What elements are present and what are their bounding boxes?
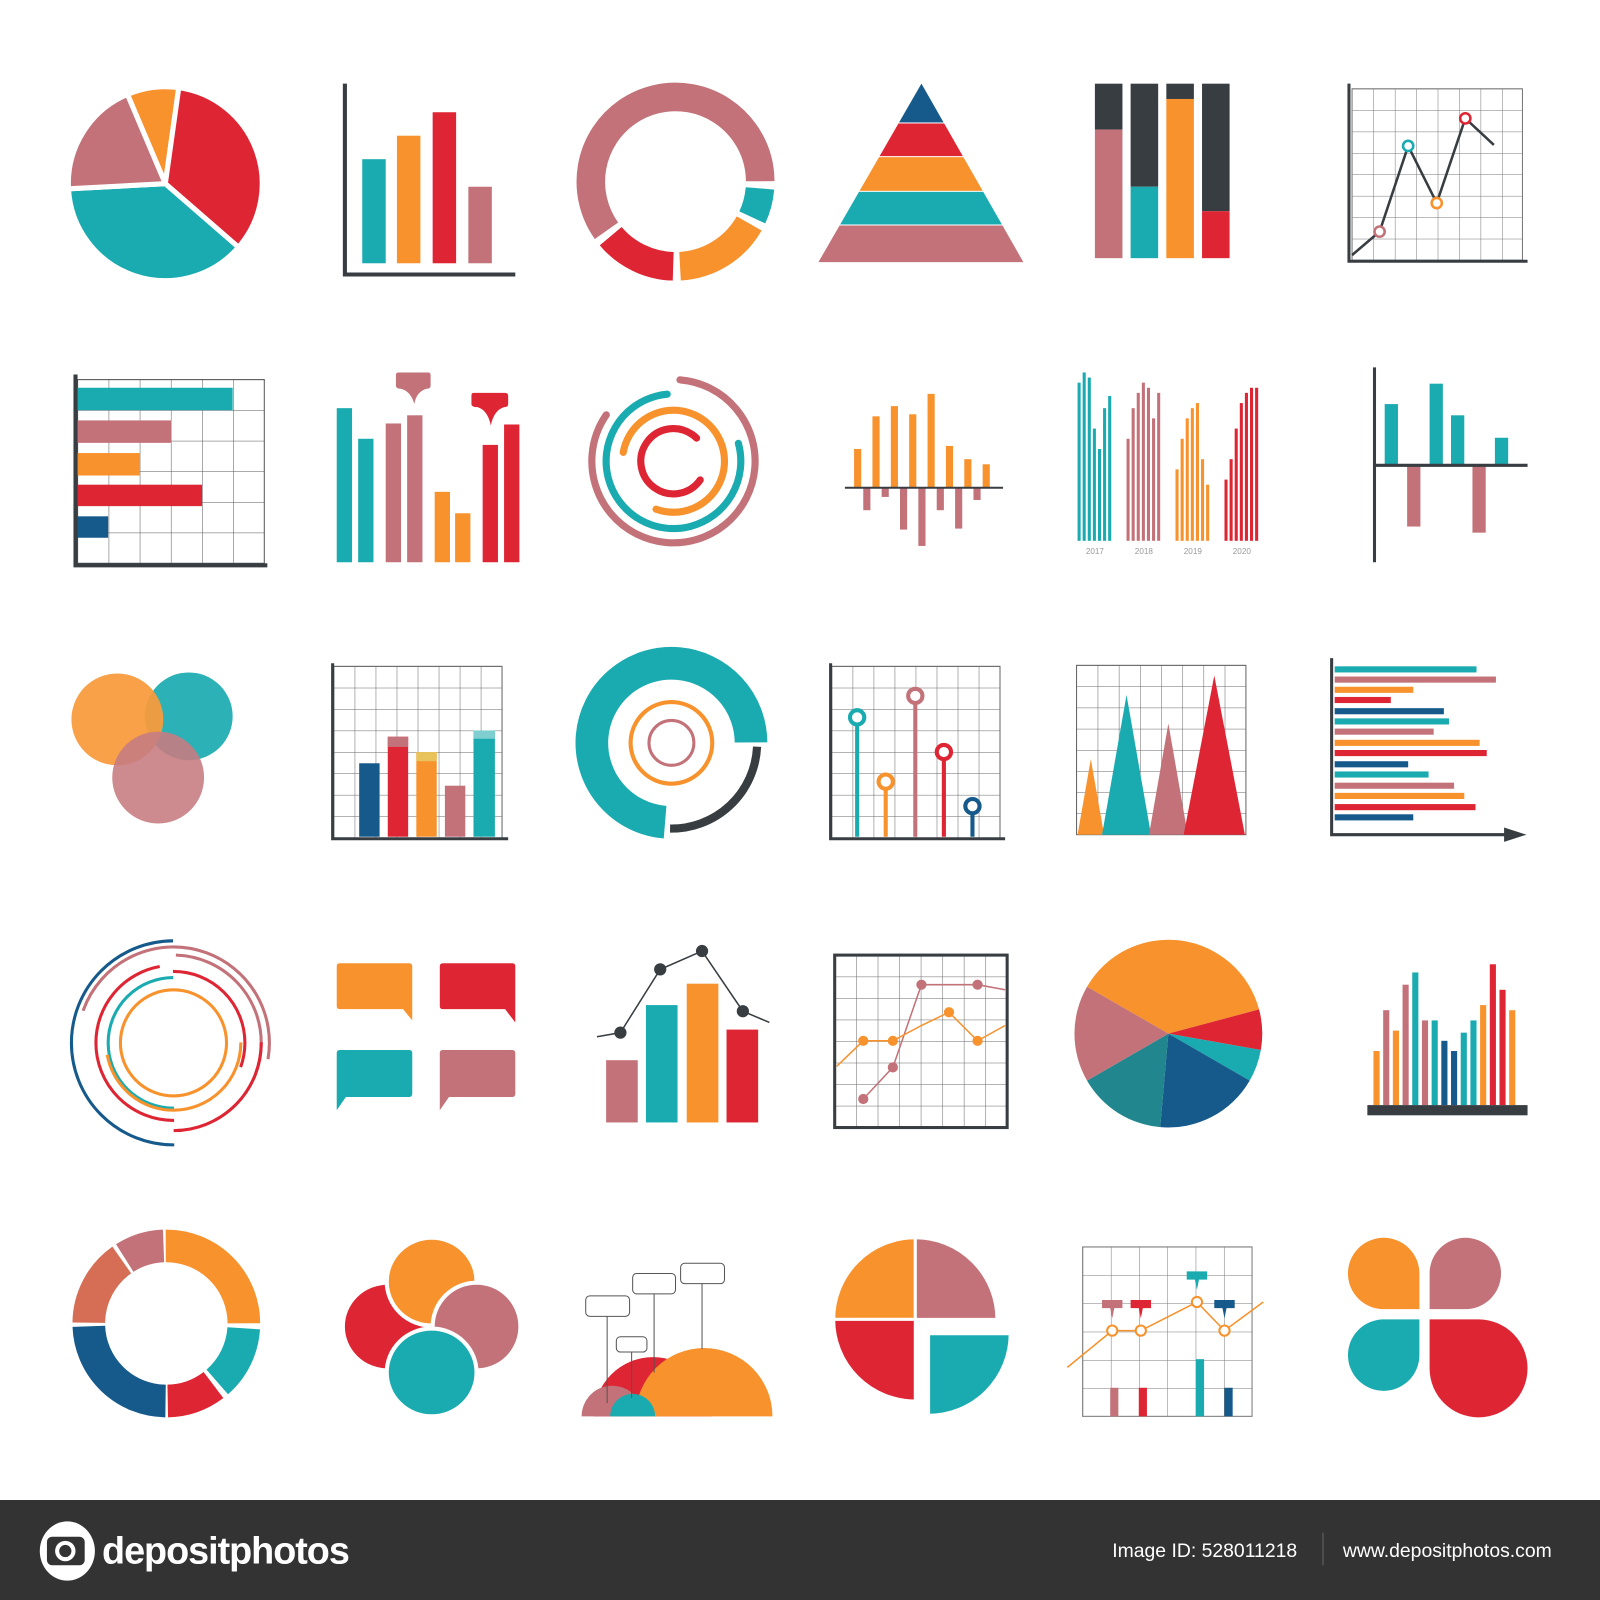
- grid line chart 22: [835, 955, 1007, 1128]
- bar chart with pins 8: [337, 372, 519, 562]
- quarter pie 28: [834, 1238, 1010, 1415]
- grouped yearly bars 11: 2018: [1135, 547, 1153, 556]
- quarter clover 30: [1348, 1238, 1528, 1417]
- logo text: depositphotos: [102, 1529, 349, 1571]
- concentric arcs 9: [585, 373, 762, 550]
- footer bar: [0, 1500, 1600, 1600]
- positive negative bars 12: [1374, 367, 1528, 562]
- horizontal lines chart 18: [1332, 658, 1527, 842]
- segmented donut 25: [58, 1215, 275, 1432]
- grouped yearly bars 11: 2019: [1184, 547, 1202, 556]
- pie chart 23: [1074, 940, 1262, 1128]
- grouped yearly bars 11: [1078, 372, 1258, 556]
- grouped yearly bars 11: 2017: [1086, 547, 1104, 556]
- bars on base 24: [1367, 964, 1528, 1115]
- website: www.depositphotos.com: [1342, 1540, 1552, 1562]
- image id: Image ID: 528011218: [1112, 1540, 1297, 1562]
- line chart grid 6: [1349, 84, 1528, 261]
- grid bar chart 14: [333, 663, 508, 839]
- logo icon: [40, 1521, 95, 1581]
- big ring 15: [581, 653, 762, 833]
- pyramid chart 4: [816, 82, 1031, 266]
- grouped yearly bars 11: 2020: [1233, 547, 1251, 556]
- grid with pins 29: [1067, 1247, 1263, 1416]
- clover petals 26: [343, 1238, 520, 1416]
- concentric thin arcs 19: [51, 920, 296, 1166]
- venn diagram 13: [71, 672, 233, 823]
- horizontal bar grid 7: [76, 374, 267, 565]
- stacked columns 5: [1095, 84, 1230, 258]
- triangle chart 17: [1077, 665, 1246, 835]
- speech bubbles 20: [337, 963, 515, 1110]
- pie chart 1: [68, 87, 262, 281]
- lollipop chart 16: [831, 663, 1005, 839]
- donut chart 3: [558, 64, 793, 300]
- bars with line 21: [597, 945, 769, 1122]
- bar chart 2: [345, 84, 515, 274]
- wave bar chart 10: [845, 394, 1003, 546]
- hills with labels 27: [582, 1263, 772, 1416]
